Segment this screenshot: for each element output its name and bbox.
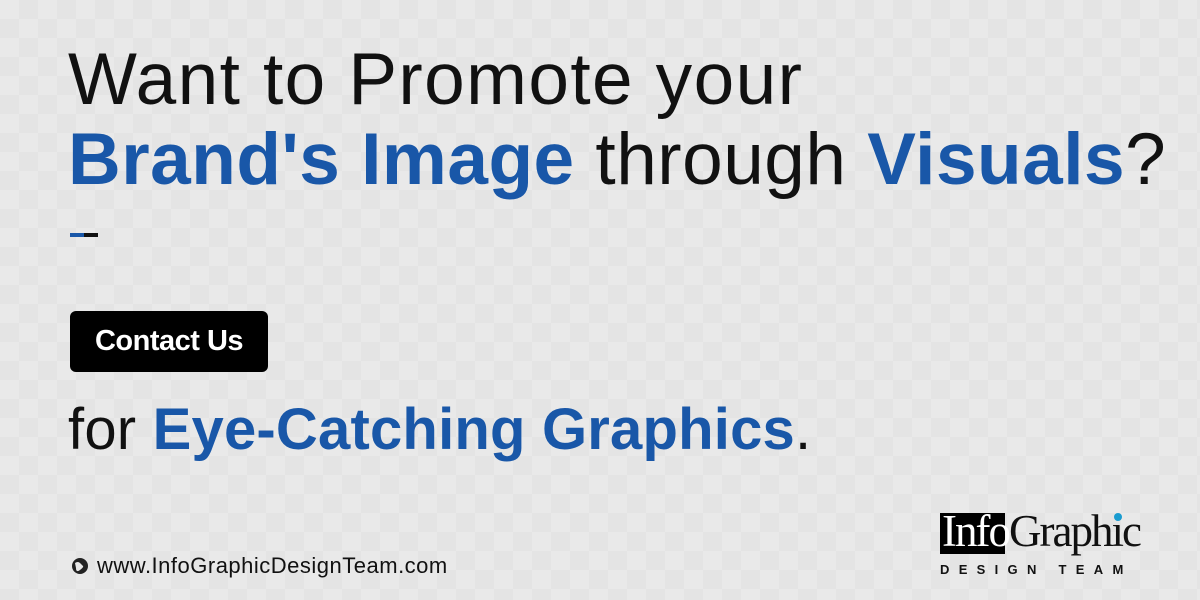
contact us button: Contact Us [95,325,243,357]
title line 1: Want to Promote your [68,39,803,120]
tagline: for Eye-Catching Graphics. [68,397,811,462]
contact us button [70,311,268,372]
website url: www.InfoGraphicDesignTeam.com [97,553,448,578]
title line 2: Brand's Image through Visuals? [68,119,1166,200]
icon: globe [72,558,88,574]
dash accent [70,233,98,237]
logo: InfoGraphic [942,506,1140,556]
logo [940,506,1141,577]
logo: DESIGN TEAM [940,562,1133,577]
